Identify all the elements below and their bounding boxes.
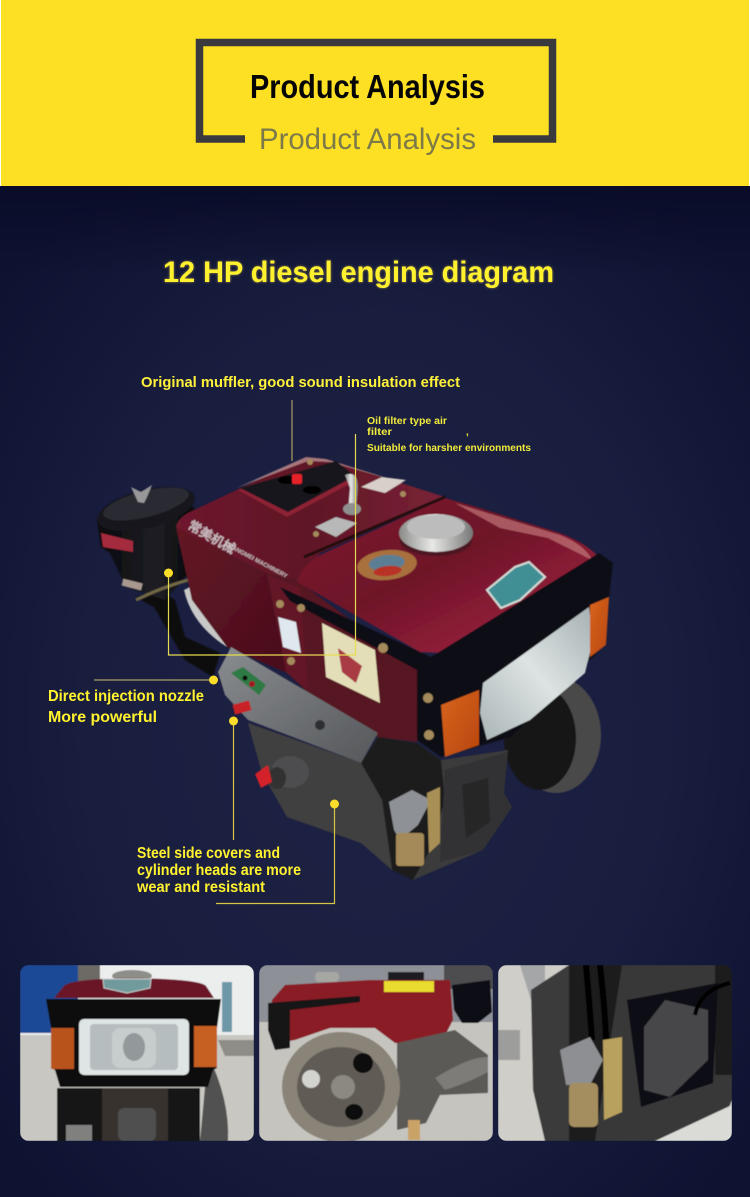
nozzle label bbox=[48, 688, 204, 726]
icon: QR sticker bbox=[315, 517, 357, 537]
icon: right amber reflector bbox=[590, 597, 609, 657]
icon: round sticker bbox=[356, 547, 418, 583]
air filter label: filter bbox=[367, 427, 392, 438]
air filter label: Suitable for harsher environments bbox=[367, 443, 531, 454]
icon: carburettor bbox=[389, 787, 440, 866]
icon: brand text: CHANGMEI MACHINERY bbox=[223, 541, 288, 580]
steel covers label: Steel side covers and bbox=[137, 845, 280, 862]
icon: lifting handle bbox=[345, 474, 358, 510]
photo: carburettor close-up bbox=[498, 965, 732, 1141]
icon: brand text bbox=[186, 518, 288, 580]
icon: air filter bbox=[93, 478, 199, 600]
engine illustration bbox=[93, 457, 613, 880]
callout: steel side covers bbox=[136, 716, 339, 904]
icon: front frame bbox=[280, 553, 613, 757]
icon: instruction sticker bbox=[322, 623, 380, 703]
icon: black control plate bbox=[238, 461, 357, 517]
main heading: 12 HP diesel engine diagram bbox=[163, 256, 554, 289]
icon: crankcase bbox=[248, 723, 512, 880]
header bracket frame bbox=[200, 42, 552, 139]
steel covers label: wear and resistant bbox=[136, 879, 265, 896]
icon: brand text: 常美机械 bbox=[185, 518, 238, 557]
nozzle label: More powerful bbox=[48, 709, 157, 726]
header band bbox=[0, 0, 750, 186]
header subtitle: Product Analysis bbox=[259, 123, 476, 156]
air filter label: , bbox=[466, 427, 469, 438]
icon: rear hood bbox=[176, 457, 445, 580]
icon: front hood bbox=[297, 498, 599, 653]
icon: S sticker bbox=[278, 617, 301, 653]
header title: Product Analysis bbox=[250, 68, 485, 105]
icon: hex badge bbox=[487, 562, 545, 608]
icon: white label bbox=[361, 477, 406, 493]
icon: centre panel bbox=[266, 573, 417, 742]
photo: flywheel side view bbox=[259, 965, 493, 1142]
air filter label bbox=[367, 416, 531, 454]
steel covers label: cylinder heads are more bbox=[137, 862, 301, 879]
icon: left amber reflector bbox=[441, 690, 479, 757]
icon: red decompress lever bbox=[255, 756, 309, 789]
callout: injection nozzle bbox=[48, 676, 218, 726]
icon: intake pipe bbox=[136, 590, 220, 677]
nozzle label: Direct injection nozzle bbox=[48, 688, 204, 705]
main heading: 12 HP diesel engine diagram bbox=[163, 256, 554, 289]
icon: bolts bbox=[276, 459, 434, 740]
icon: headlight bbox=[480, 607, 593, 740]
icon: fuel cap bbox=[399, 514, 473, 556]
icon: grey valve cover bbox=[218, 647, 378, 763]
icon: flywheel bbox=[504, 677, 601, 793]
callout: air filter bbox=[164, 416, 531, 655]
steel covers label bbox=[136, 845, 301, 896]
muffler label: Original muffler, good sound insulation effect bbox=[141, 374, 460, 391]
air filter label: Oil filter type air bbox=[367, 416, 447, 427]
icon: red side panel bbox=[176, 527, 287, 673]
photo: front view bbox=[20, 965, 254, 1141]
